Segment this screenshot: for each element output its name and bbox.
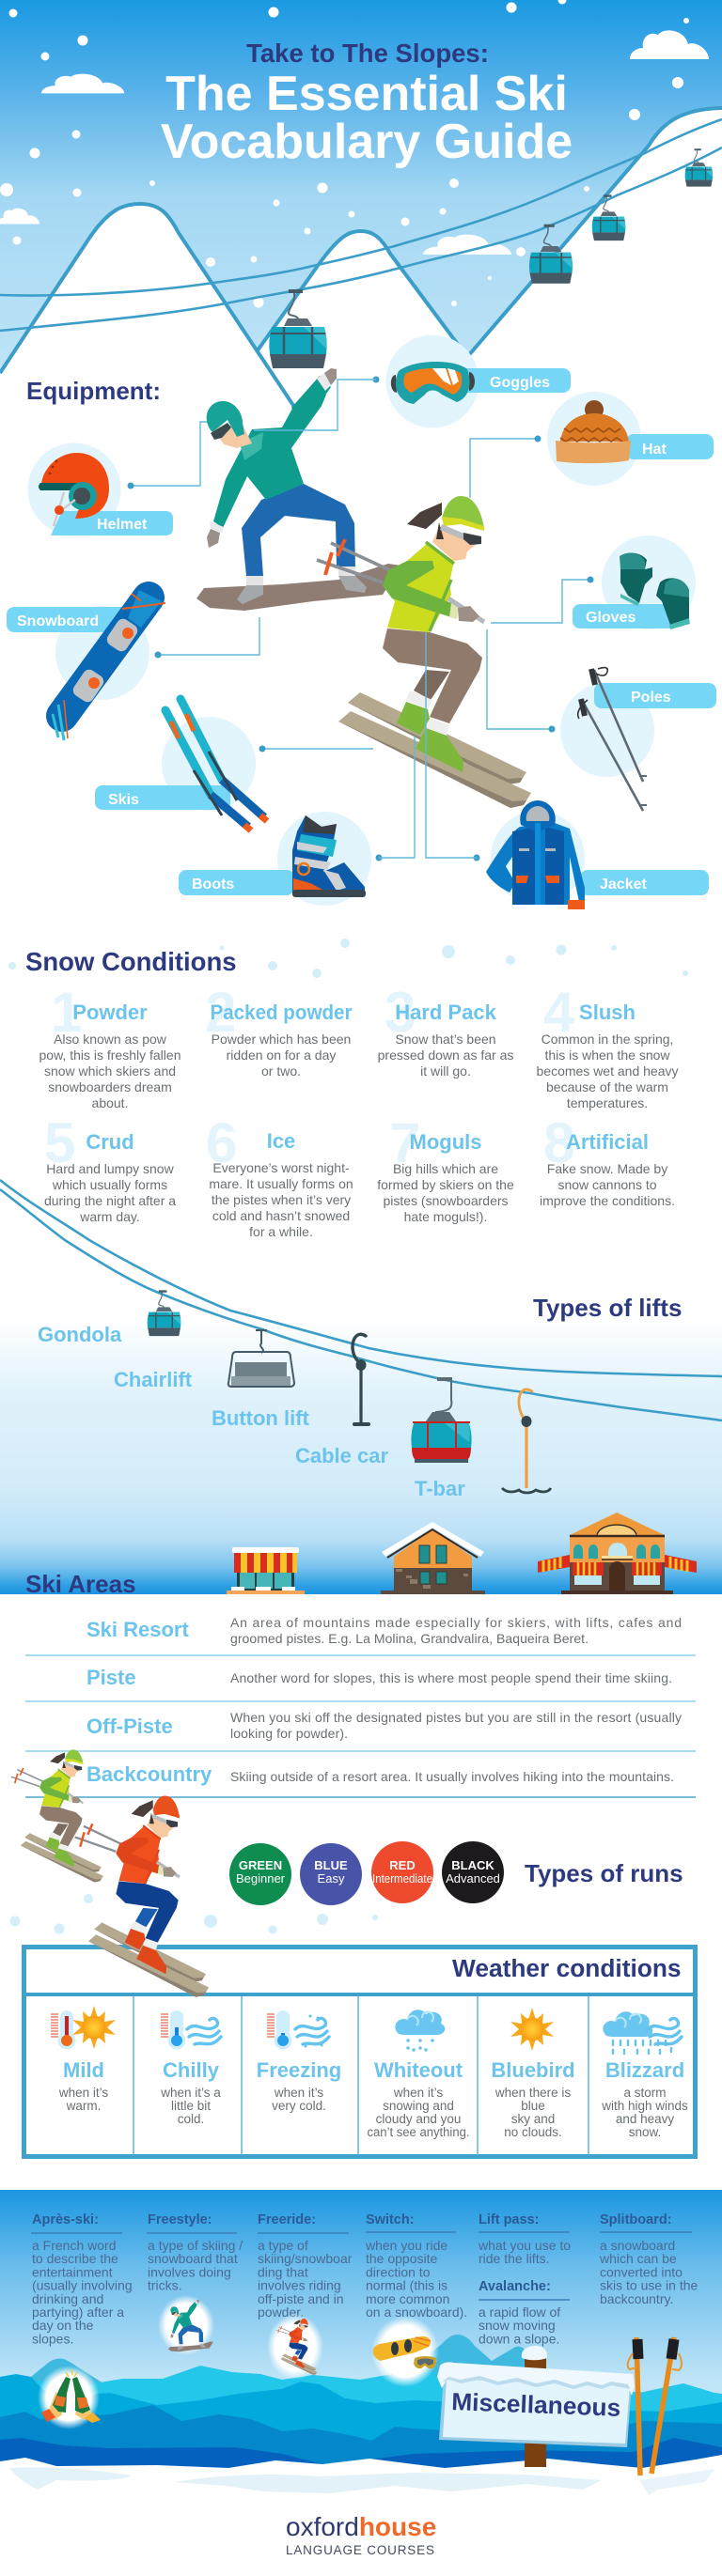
snow condition: artificial	[540, 1111, 675, 1208]
snowboarder figure	[196, 368, 401, 611]
snow condition: slush	[537, 981, 678, 1110]
weather: freezing: when it’s	[274, 2086, 323, 2100]
misc: freestyle: snowboard that	[148, 2251, 238, 2266]
goggles connector	[254, 380, 376, 430]
snow condition: hard pack: 3	[385, 981, 416, 1044]
snow condition: ice: cold and hasn’t snowed	[212, 1208, 350, 1223]
type of run: green: Beginner	[236, 1871, 286, 1885]
snow condition: hard pack: it will go.	[420, 1063, 471, 1079]
decorative snow dots	[8, 939, 688, 978]
item: helmet: Helmet	[97, 517, 148, 533]
snow condition: powder: Also known as pow	[54, 1032, 167, 1047]
snow condition: artificial: snow cannons to	[557, 1177, 657, 1192]
weather: blizzard: and heavy	[616, 2112, 674, 2126]
snow condition: ice: 6	[206, 1111, 237, 1174]
title: Take to The Slopes:	[246, 39, 489, 68]
item: jacket: Jacket	[600, 877, 647, 892]
misc: apres-ski: entertainment	[32, 2264, 113, 2279]
item: jacket	[486, 800, 709, 909]
icon: small orange skier	[267, 2314, 323, 2380]
snow condition: ice: Everyone’s worst night-	[212, 1160, 350, 1175]
snow condition: packed powder: 2	[205, 981, 236, 1044]
ski areas table: Off-Piste	[86, 1715, 173, 1738]
snow condition: crud: Hard and lumpy snow	[46, 1161, 175, 1176]
item: goggles	[391, 362, 571, 404]
item: poles: Poles	[631, 690, 671, 706]
icon: gondola 1	[269, 289, 327, 368]
snow condition: artificial: Artificial	[566, 1130, 649, 1154]
misc: freeride: powder.	[258, 2304, 304, 2320]
heading: equipment: Equipment:	[26, 377, 161, 405]
type of run: black	[442, 1841, 504, 1903]
misc: freeride	[258, 2212, 353, 2320]
misc: apres-ski: partying) after a	[32, 2304, 124, 2320]
snow condition: ice: the pistes when it’s very	[212, 1192, 351, 1207]
snow condition: slush: because of the warm	[546, 1079, 668, 1094]
mountains	[0, 108, 722, 423]
miscellaneous background	[0, 2190, 722, 2472]
misc: lift pass: Lift pass:	[479, 2212, 539, 2227]
sky background	[0, 0, 722, 423]
snow condition: moguls: hate moguls!).	[404, 1209, 487, 1224]
snow condition: moguls: pistes (snowboarders	[383, 1193, 509, 1208]
snow condition: slush: temperatures.	[567, 1095, 648, 1110]
snow condition: crud: warm day.	[79, 1209, 140, 1224]
lower cable lines	[0, 1180, 722, 1420]
ski areas table: Another word for slopes, this is where most people spend their time skiing.	[230, 1670, 672, 1685]
lift: gondola: Gondola	[38, 1323, 122, 1346]
snow condition: crud: Crud	[86, 1130, 134, 1154]
ski areas table: looking for powder).	[230, 1726, 348, 1741]
item: hat: Hat	[642, 442, 667, 458]
lift: chairlift: Chairlift	[114, 1368, 193, 1391]
type of run: blue	[300, 1843, 362, 1905]
misc: apres-ski: day on the	[32, 2318, 94, 2333]
ski areas table: Piste	[86, 1666, 136, 1689]
misc: freestyle: tricks.	[148, 2278, 182, 2293]
misc: switch	[365, 2212, 467, 2320]
snow condition: slush: Common in the spring,	[542, 1032, 673, 1047]
logo	[286, 2512, 436, 2557]
snow condition: slush: this is when the snow	[544, 1047, 670, 1063]
snow condition: moguls: 7	[389, 1111, 420, 1174]
snow condition: ice: mare. It usually forms on	[209, 1176, 353, 1191]
misc: apres-ski: Après-ski:	[32, 2212, 99, 2227]
snow condition: powder	[39, 981, 180, 1110]
weather: mild: Mild	[63, 2058, 104, 2082]
weather: whiteout: cloudy and you	[376, 2112, 461, 2126]
lift: cable car	[295, 1377, 472, 1467]
type of run: blue: BLUE	[314, 1858, 348, 1872]
heading: types of runs: Types of runs	[525, 1859, 683, 1887]
snow condition: crud	[44, 1111, 176, 1224]
ski areas table: When you ski off the designated pistes but you are still in the resort (usually	[230, 1710, 682, 1725]
weather: chilly: little bit	[171, 2099, 211, 2113]
weather: freezing: very cold.	[272, 2099, 326, 2113]
item: goggles: Goggles	[490, 375, 550, 391]
sign: miscellaneous	[437, 2346, 635, 2467]
snow condition: slush: 4	[543, 981, 575, 1044]
ski areas table: groomed pistes. E.g. La Molina, Grandvalira, Baqueira Beret.	[230, 1631, 589, 1646]
misc: apres-ski: a French word	[32, 2238, 116, 2253]
misc: apres-ski: drinking and	[32, 2291, 103, 2306]
item: boots	[179, 815, 366, 897]
weather: freezing: Freezing	[257, 2058, 341, 2082]
icon: beer bottles	[38, 2366, 101, 2429]
misc: avalanche: down a slope.	[479, 2331, 559, 2346]
icon: yellow snowboard and goggles	[371, 2316, 439, 2387]
weather: freezing	[257, 2010, 341, 2113]
snow condition: powder: pow, this is freshly fallen	[39, 1047, 180, 1063]
misc: splitboard: backcountry.	[600, 2291, 673, 2306]
type of run: blue: Easy	[318, 1871, 345, 1885]
snow foreground	[0, 2455, 722, 2576]
misc: avalanche: a rapid flow of	[479, 2304, 560, 2320]
logo: oxfordhouse	[286, 2512, 436, 2541]
snow condition: artificial: improve the conditions.	[540, 1193, 675, 1208]
icon: gondola 3	[592, 194, 625, 241]
snow condition: powder: Powder	[72, 1001, 148, 1024]
weather: chilly: Chilly	[163, 2058, 220, 2082]
snow condition: packed powder	[205, 981, 353, 1079]
ski areas table	[25, 1615, 696, 1797]
weather: chilly: cold.	[178, 2112, 204, 2126]
weather: mild: when it’s	[58, 2086, 108, 2100]
misc: apres-ski: to describe the	[32, 2251, 118, 2266]
ski areas table: Skiing outside of a resort area. It usually involves hiking into the mountains.	[230, 1769, 674, 1784]
item: snowboard: Snowboard	[17, 613, 99, 629]
snow condition: powder: about.	[92, 1095, 128, 1110]
snow condition: crud: which usually forms	[52, 1177, 167, 1192]
icon: orange ski poles	[628, 2337, 682, 2475]
building: hotel	[538, 1513, 697, 1594]
type of run: black: Advanced	[446, 1871, 500, 1885]
snow condition: powder: 1	[51, 981, 82, 1044]
snow condition: hard pack: Snow that’s been	[395, 1032, 496, 1047]
weather: mild	[51, 2006, 116, 2113]
type of run: red: Intermediate	[372, 1871, 432, 1885]
lift: t-bar	[415, 1389, 551, 1500]
connector dots	[128, 376, 594, 861]
weather: bluebird: blue	[521, 2099, 545, 2113]
snow condition: ice: for a while.	[249, 1224, 313, 1239]
cable lines	[0, 119, 722, 331]
snow condition: ice	[206, 1111, 353, 1239]
misc: lift pass: ride the lifts.	[479, 2251, 549, 2266]
misc: freestyle: Freestyle:	[148, 2212, 212, 2227]
type of run: black: BLACK	[451, 1858, 494, 1872]
lift: chairlift	[114, 1330, 294, 1391]
misc: splitboard: skis to use in the	[600, 2278, 698, 2293]
weather: mild: warm.	[66, 2099, 101, 2113]
type of run: red	[371, 1841, 433, 1903]
weather: bluebird: Bluebird	[491, 2058, 575, 2082]
weather: whiteout: Whiteout	[374, 2058, 463, 2082]
snow condition: slush: becomes wet and heavy	[537, 1063, 678, 1079]
item: poles	[578, 668, 716, 811]
weather: whiteout	[367, 2010, 470, 2139]
misc: avalanche: snow moving	[479, 2318, 556, 2333]
misc: switch: Switch:	[366, 2212, 415, 2227]
misc: splitboard: which can be	[599, 2251, 677, 2266]
misc: freeride: skiing/snowboar	[258, 2251, 353, 2266]
snow condition: crud: during the night after a	[44, 1193, 176, 1208]
misc: avalanche	[479, 2279, 570, 2346]
lift: cable car: Cable car	[295, 1444, 388, 1467]
building: cafe	[227, 1547, 305, 1594]
icon: gondola 2	[529, 225, 573, 284]
type of run: red: RED	[389, 1858, 416, 1872]
light snow dots	[9, 1894, 378, 1933]
weather conditions table	[24, 1947, 696, 2157]
misc: switch: more common	[366, 2291, 449, 2306]
snow condition: hard pack: Hard Pack	[395, 1001, 497, 1024]
item: hat	[556, 400, 714, 463]
snow condition: packed powder: or two.	[261, 1063, 301, 1079]
weather: chilly: when it’s a	[160, 2086, 221, 2100]
misc: freeride: ding that	[258, 2264, 308, 2279]
misc: lift pass	[478, 2212, 571, 2266]
weather: chilly	[160, 2010, 221, 2126]
building: house	[381, 1522, 485, 1594]
misc: switch: on a snowboard).	[366, 2304, 467, 2320]
misc: freestyle: a type of skiing /	[148, 2238, 243, 2253]
snow condition: artificial: Fake snow. Made by	[547, 1161, 667, 1176]
weather: blizzard: with high winds	[601, 2099, 688, 2113]
snow condition: ice: Ice	[267, 1129, 295, 1153]
snow condition: moguls: Big hills which are	[393, 1161, 498, 1176]
snow condition: powder: snowboarders dream	[48, 1079, 172, 1094]
type of run: green: GREEN	[239, 1858, 282, 1872]
title: The Essential Ski	[165, 67, 568, 121]
snow condition: hard pack: pressed down as far as	[378, 1047, 513, 1063]
item: helmet	[39, 453, 173, 535]
weather: bluebird: no clouds.	[504, 2125, 562, 2139]
item: snowboard	[7, 590, 165, 740]
misc: freestyle: involves doing	[148, 2264, 231, 2279]
connector lines behind figures	[131, 422, 590, 749]
weather: bluebird: when there is	[494, 2086, 571, 2100]
misc: switch: when you ride	[365, 2238, 447, 2253]
item: skis	[95, 699, 267, 830]
misc: apres-ski: slopes.	[32, 2331, 73, 2346]
heading: snow conditions: Snow Conditions	[25, 947, 237, 976]
ski areas table: Ski Resort	[86, 1618, 189, 1641]
misc: splitboard: a snowboard	[600, 2238, 675, 2253]
snow condition: packed powder: Powder which has been	[212, 1032, 351, 1047]
misc: freeride: a type of	[258, 2238, 308, 2253]
item: gloves: Gloves	[586, 610, 636, 626]
ski areas table: An area of mountains made especially for skiers, with lifts, cafes and	[230, 1615, 682, 1630]
orange skier	[75, 1796, 209, 1997]
lifts background	[0, 1320, 722, 1594]
misc: freeride: Freeride:	[258, 2212, 316, 2227]
misc: freeride: involves riding	[258, 2278, 341, 2293]
weather: blizzard: snow.	[629, 2125, 661, 2139]
snow condition: packed powder: Packed powder	[211, 1001, 353, 1024]
snow condition: slush: Slush	[579, 1001, 636, 1024]
weather: whiteout: can’t see anything.	[367, 2125, 470, 2139]
snow condition: packed powder: ridden on for a day	[227, 1047, 336, 1063]
lift: t-bar: T-bar	[415, 1477, 465, 1500]
weather: bluebird	[491, 2008, 575, 2139]
weather: whiteout: snowing and	[383, 2099, 454, 2113]
misc: switch: normal (this is	[366, 2278, 447, 2293]
weather: bluebird: sky and	[511, 2112, 555, 2126]
item: skis: Skis	[108, 792, 139, 808]
title: Vocabulary Guide	[161, 115, 573, 169]
weather: blizzard: Blizzard	[605, 2058, 684, 2082]
item: gloves	[573, 553, 690, 629]
title	[161, 39, 573, 169]
snow condition: artificial: 8	[543, 1111, 574, 1174]
lift: button lift	[212, 1334, 370, 1430]
small green skier	[11, 1749, 103, 1883]
ski areas table: Backcountry	[86, 1762, 212, 1786]
snow condition: moguls	[377, 1111, 514, 1224]
misc: apres-ski	[31, 2212, 133, 2346]
snow condition: moguls: Moguls	[410, 1130, 481, 1154]
weather conditions table: Weather conditions	[452, 1954, 682, 1982]
misc: freestyle	[147, 2212, 243, 2293]
misc: splitboard: Splitboard:	[600, 2212, 672, 2227]
snow condition: crud: 5	[44, 1111, 75, 1174]
icon: gondola 4	[685, 148, 713, 187]
mountains layers	[0, 2335, 722, 2480]
lift: button lift: Button lift	[212, 1406, 310, 1430]
weather: blizzard	[601, 2011, 688, 2139]
clouds and snowflakes in sky	[0, 0, 709, 308]
logo: LANGUAGE COURSES	[286, 2543, 434, 2557]
misc: switch: direction to	[366, 2264, 431, 2279]
misc: splitboard: converted into	[600, 2264, 683, 2279]
misc: freeride: off-piste and in	[258, 2291, 344, 2306]
snow condition: moguls: formed by skiers on the	[377, 1177, 514, 1192]
snow condition: hard pack	[378, 981, 513, 1079]
skier figure	[317, 496, 531, 808]
connector lines over skier	[379, 632, 477, 858]
type of run: green	[229, 1843, 291, 1905]
lift: gondola	[38, 1290, 180, 1346]
misc: splitboard	[599, 2212, 698, 2306]
misc: lift pass: what you use to	[478, 2238, 571, 2253]
misc: switch: the opposite	[366, 2251, 437, 2266]
misc: avalanche: Avalanche:	[479, 2279, 551, 2294]
snow condition: powder: snow which skiers and	[44, 1063, 176, 1079]
icon: small snowboarder	[158, 2295, 214, 2355]
heading: types of lifts: Types of lifts	[533, 1294, 682, 1322]
item: boots: Boots	[192, 877, 234, 892]
weather: blizzard: a storm	[623, 2086, 667, 2100]
sign: miscellaneous: Miscellaneous	[451, 2387, 621, 2422]
misc: apres-ski: (usually involving	[32, 2278, 133, 2293]
item backdrops	[28, 334, 696, 906]
weather: whiteout: when it’s	[393, 2086, 443, 2100]
heading: ski areas: Ski Areas	[25, 1570, 136, 1598]
